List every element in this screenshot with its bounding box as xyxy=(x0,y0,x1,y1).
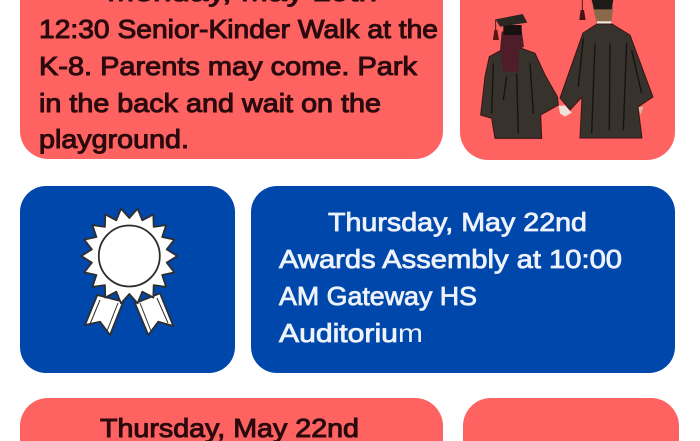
heading: Thursday date: Thursday, May 22nd xyxy=(328,207,587,237)
woman graduate xyxy=(481,14,558,138)
text block: walk details: in the back and wait on the xyxy=(39,88,381,118)
panel: Senior-Kinder Walk xyxy=(20,0,443,159)
icon: award rosette xyxy=(81,209,177,335)
text block: assembly details: Auditoriu m xyxy=(279,318,423,348)
icon: graduates holding hands xyxy=(481,0,653,138)
text block: walk details xyxy=(39,14,438,154)
panel: bottom right image xyxy=(463,398,679,441)
panel: award ribbon xyxy=(20,186,235,373)
panel: Awards Assembly xyxy=(251,186,675,373)
text block: assembly details: AM Gateway HS xyxy=(279,281,477,311)
panel: Thursday event xyxy=(20,398,443,441)
man graduate xyxy=(559,0,653,138)
panel: graduates image xyxy=(460,0,675,160)
text block: walk details: 12:30 Senior-Kinder Walk at the xyxy=(39,14,438,44)
text block: assembly details: Awards Assembly at 10:00 xyxy=(279,244,622,274)
text block: assembly details xyxy=(279,244,622,348)
text block: walk details: playground. xyxy=(39,124,189,154)
text block: walk details: K-8. Parents may come. Park xyxy=(39,51,418,81)
